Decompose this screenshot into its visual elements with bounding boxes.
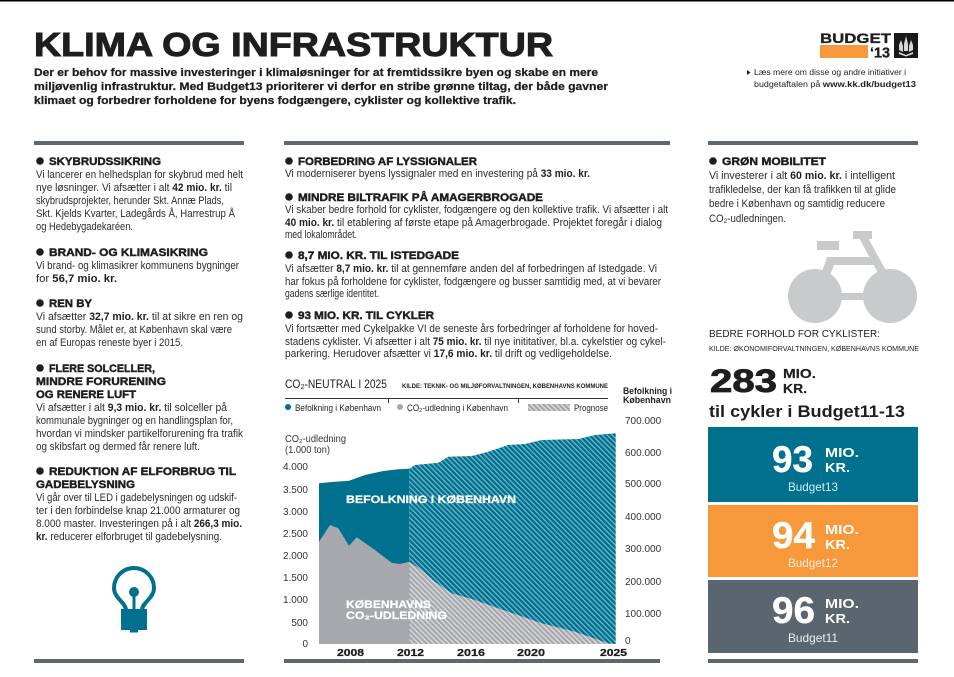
box: Budget13: Budget13 [788, 480, 838, 494]
box: Budget13: MIO. [825, 445, 859, 460]
CO2 label: KØBENHAVNS [346, 599, 431, 611]
total figure: MIO. [783, 366, 816, 381]
x axis years: 2008 [337, 647, 364, 659]
x axis years: 2025 [600, 647, 627, 659]
section: Grøn mobilitet: trafikledelse, der kan få trafikken til at glide [709, 184, 896, 196]
section: Ren by: Vi afsætter 32,7 mio. kr. til at sikre en ren og [36, 311, 243, 323]
box: Budget11 [708, 580, 918, 653]
left axis labels [283, 462, 308, 650]
section: Skybrudssikring: og Hedebygadekaréen. [36, 221, 133, 233]
box: Budget12: KR. [825, 537, 850, 552]
section: Mindre biltrafik: med lokalområdet. [285, 229, 357, 241]
section: Istedgade: gadens særlige identitet. [285, 288, 379, 300]
box: Budget11: KR. [825, 611, 850, 626]
section: Flere solceller [36, 363, 244, 453]
chart legend: Prognose [574, 403, 608, 413]
section: Skybrudssikring: SKYBRUDSSIKRING [49, 156, 161, 168]
box: Budget12 [708, 505, 918, 577]
section: Brand- og klimasikring: BRAND- OG KLIMASIKRING [49, 247, 208, 259]
right axis title [623, 386, 672, 405]
population area forecast [409, 433, 616, 644]
panel: left column [34, 141, 244, 663]
right axis labels: 700.000 [625, 416, 662, 427]
intro text [34, 67, 609, 107]
section: Grøn mobilitet: GRØN MOBILITET [722, 156, 826, 168]
x axis years: 2016 [457, 647, 485, 659]
box: Budget12: 94 [772, 515, 815, 556]
left axis title: (1.000 ton) [285, 445, 330, 456]
right axis labels: 0 [625, 636, 631, 647]
left axis labels: 0 [302, 639, 308, 650]
section: Ren by [36, 298, 243, 349]
section: Ren by: sund storby. Målet er, at København skal være [36, 324, 232, 336]
left axis labels: 1.000 [283, 595, 308, 606]
left axis labels: 500 [291, 618, 308, 629]
right axis labels [625, 416, 662, 647]
box: Budget13: KR. [825, 460, 850, 475]
section: Skybrudssikring [36, 156, 243, 233]
box: Budget11: 96 [772, 590, 815, 631]
population area historic [319, 469, 409, 644]
box: Budget11: Budget11 [788, 631, 838, 645]
section: Grøn mobilitet: CO₂-udledningen. [709, 213, 786, 225]
cycling source: KILDE: ØKONOMIFORVALTNINGEN, KØBENHAVNS KOMMUNE [709, 346, 919, 353]
section: Cykler [285, 310, 666, 360]
section: Istedgade [285, 250, 661, 300]
CO2 label: CO₂-UDLEDNING [346, 610, 447, 622]
right axis labels: 400.000 [625, 512, 662, 523]
right axis labels: 600.000 [625, 448, 662, 459]
section: Istedgade: har fokus på forholdene for cyklister, fodgængere og busser samtidig med, at vi bevarer [285, 276, 661, 288]
logo: Budget '13: BUDGET [820, 31, 892, 46]
section: Mindre biltrafik: MINDRE BILTRAFIK PÅ AMAGERBROGADE [298, 191, 543, 204]
panel: middle column [283, 141, 672, 663]
section: Ren by: en af Europas reneste byer i 2015. [36, 337, 183, 349]
left axis labels: 3.500 [283, 485, 308, 496]
section: Brand- og klimasikring [36, 247, 239, 285]
section: Brand- og klimasikring: Vi brand- og klimasikrer kommunens bygninger [36, 260, 239, 272]
section: Flere solceller: FLERE SOLCELLER, [49, 363, 155, 375]
section: Reduktion af elforbrug: REDUKTION AF ELFORBRUG TIL [49, 466, 236, 478]
right axis title: Befolkning i [623, 386, 672, 396]
x axis years [337, 647, 627, 659]
section: Flere solceller: Vi afsætter i alt 9,3 mio. kr. til solceller på [36, 402, 227, 414]
CO2 area historic [319, 525, 409, 644]
x axis years: 2020 [517, 647, 545, 659]
right axis labels: 100.000 [625, 609, 662, 620]
panel: right column [708, 141, 919, 663]
box: Budget12: MIO. [825, 522, 859, 537]
section: Ren by: REN BY [49, 298, 93, 310]
left axis title: CO₂-udledning [285, 434, 346, 445]
chart source: KILDE: TEKNIK- OG MILJØFORVALTNINGEN, KØBENHAVNS KOMMUNE [402, 384, 608, 390]
left axis labels: 2.000 [283, 551, 308, 562]
section: Mindre biltrafik: Vi skaber bedre forhold for cyklister, fodgængere og den kollektive trafik. Vi afsætter i alt [285, 204, 668, 216]
section: Grøn mobilitet: bedre i København og samtidig reducere [709, 198, 885, 210]
link note: budgetaftalen på www.kk.dk/budget13 [754, 79, 916, 89]
section: Reduktion af elforbrug: 8.000 master. Investeringen på i alt 266,3 mio. [36, 518, 242, 530]
total figure: til cykler i Budget11-13 [709, 402, 905, 421]
right axis title: København [623, 395, 671, 405]
section: Cykler: stadens cyklister. Vi afsætter i alt 75 mio. kr. til nye inititativer, bl.a. cykelstier og cykel- [285, 336, 666, 348]
section: Istedgade: 8,7 MIO. KR. TIL ISTEDGADE [298, 250, 459, 262]
population label: BEFOLKNING I KØBENHAVN [346, 494, 516, 506]
chart: CO2-neutral i 2025 [283, 377, 672, 659]
section: Reduktion af elforbrug: Vi går over til LED i gadebelysningen og udskif- [36, 492, 237, 504]
logo: Budget '13 [820, 31, 918, 62]
left axis labels: 2.500 [283, 529, 308, 540]
chart legend [285, 403, 608, 413]
section: Reduktion af elforbrug: GADEBELYSNING [36, 479, 135, 491]
intro text: miljøvenlig infrastruktur. Med Budget13 prioriterer vi derfor en stribe grønne tiltag, der både gavner [34, 81, 609, 93]
section: Forbedring af lyssignaler: Vi moderniserer byens lyssignaler med en investering på 33 mio. kr. [285, 168, 590, 180]
section: Skybrudssikring: skybrudsprojekter, herunder Skt. Annæ Plads, [36, 195, 224, 207]
chart legend: CO₂-udledning i København [407, 403, 508, 413]
box: Budget11: MIO. [825, 596, 859, 611]
section: Flere solceller: OG RENERE LUFT [36, 389, 136, 401]
x axis years: 2012 [397, 647, 424, 659]
logo: Budget '13: ‘13 [870, 44, 890, 62]
section: Flere solceller: og skibsfart og dermed får renere luft. [36, 441, 200, 453]
section: Grøn mobilitet [709, 156, 896, 225]
CO2 label [346, 599, 447, 622]
right axis labels: 500.000 [625, 479, 662, 490]
left axis title [285, 434, 346, 456]
total figure: KR. [783, 381, 807, 396]
section: Skybrudssikring: Skt. Kjelds Kvarter, Ladegårds Å, Harrestrup Å [36, 207, 236, 220]
section: Mindre biltrafik: 40 mio. kr. til etablering af første etape på Amagerbrogade. Projektet foregår i dialog [285, 217, 662, 229]
cycling heading: BEDRE FORHOLD FOR CYKLISTER: [709, 328, 880, 340]
section: Cykler: parkering. Herudover afsætter vi 17,6 mio. kr. til drift og vedligeholdelse. [285, 348, 612, 360]
left axis labels: 4.000 [283, 462, 308, 473]
chart title: CO₂-NEUTRAL I 2025 [285, 377, 387, 391]
section: Flere solceller: hvordan vi mindsker partikelforurening fra trafik [36, 428, 244, 440]
left axis labels: 3.000 [283, 507, 308, 518]
section: Forbedring af lyssignaler: FORBEDRING AF LYSSIGNALER [298, 156, 477, 168]
section: Cykler: Vi fortsætter med Cykelpakke VI de seneste års forbedringer af forholdene for hoved- [285, 323, 658, 335]
link note: Læs mere om disse og andre initiativer i [754, 68, 906, 77]
total figure: 283 [710, 363, 777, 399]
right axis labels: 300.000 [625, 544, 662, 555]
box: Budget12: Budget12 [788, 556, 838, 570]
section: Skybrudssikring: nye løsninger. Vi afsætter i alt 42 mio. kr. til [36, 182, 232, 194]
section: Skybrudssikring: Vi lancerer en helhedsplan for skybrud med helt [36, 169, 243, 181]
total figure [709, 363, 905, 421]
section: Reduktion af elforbrug: kr. reducerer elforbruget til gadebelysning. [36, 531, 222, 543]
section: Brand- og klimasikring: for 56,7 mio. kr. [36, 273, 117, 285]
section: Reduktion af elforbrug: ter i den forbindelse knap 21.000 armaturer og [36, 505, 240, 517]
section: Cykler: 93 MIO. KR. TIL CYKLER [298, 310, 434, 322]
icon: light bulb [114, 568, 154, 632]
section: Mindre biltrafik [285, 191, 668, 241]
box: Budget13 [708, 427, 918, 502]
section: Flere solceller: kommunale bygninger og en handlingsplan for, [36, 415, 233, 427]
intro text: klimaet og forbedrer forholdene for byens fodgængere, cyklister og kollektive trafik. [34, 95, 516, 107]
link note [747, 68, 916, 89]
title: KLIMA OG INFRASTRUKTUR [34, 26, 553, 63]
icon: bicycle [788, 231, 917, 323]
left axis labels: 1.500 [283, 573, 308, 584]
section: Istedgade: Vi afsætter 8,7 mio. kr. til at gennemføre anden del af forbedringen af Istedgade. Vi [285, 263, 657, 275]
intro text: Der er behov for massive investeringer i klimaløsninger for at fremtidssikre byen og skabe en mere [34, 67, 598, 79]
CO2 area forecast [409, 562, 616, 644]
section: Reduktion af elforbrug [36, 466, 242, 543]
right axis labels: 200.000 [625, 577, 662, 588]
box: Budget13: 93 [772, 439, 813, 480]
section: Forbedring af lyssignaler [285, 156, 590, 180]
chart legend: Befolkning i København [295, 403, 381, 413]
section: Grøn mobilitet: Vi investerer i alt 60 mio. kr. i intelligent [709, 170, 895, 182]
section: Flere solceller: MINDRE FORURENING [36, 376, 166, 388]
